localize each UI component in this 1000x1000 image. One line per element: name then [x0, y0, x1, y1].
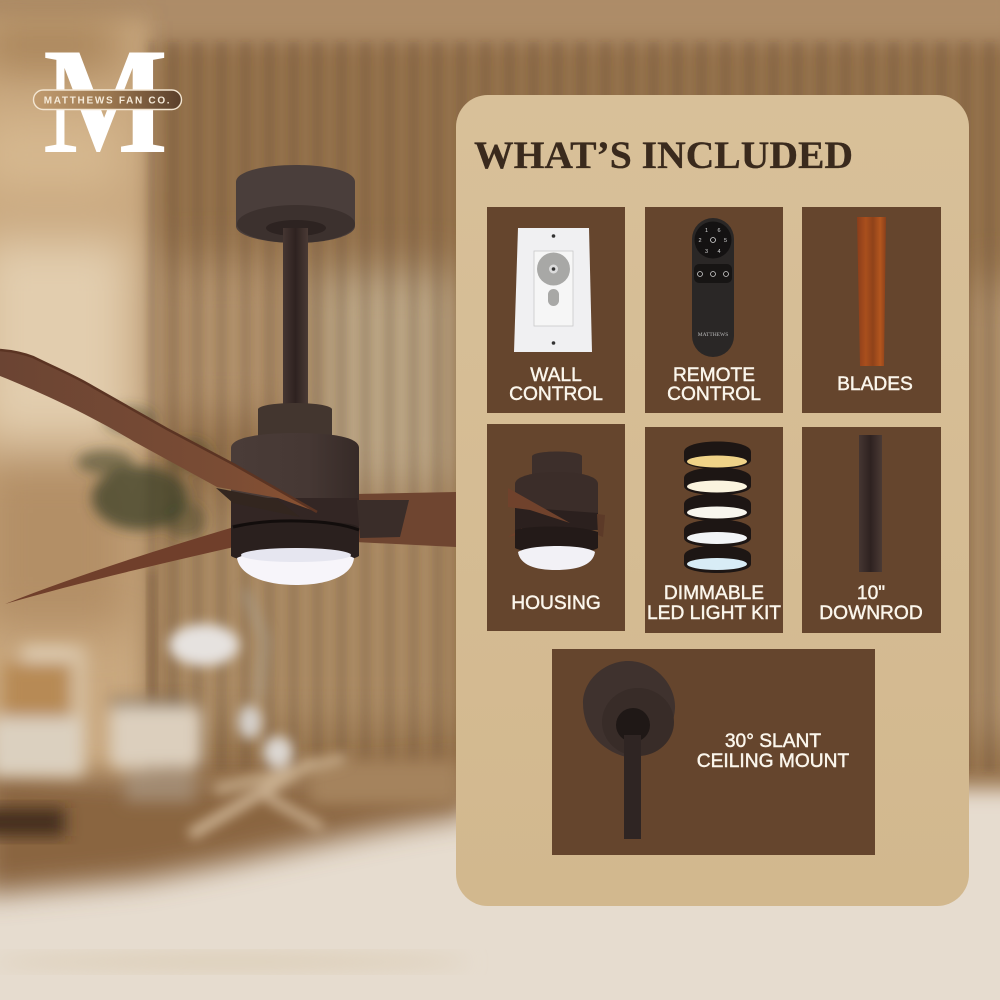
- label: DOWNROD: [819, 603, 923, 624]
- label: CEILING MOUNT: [697, 751, 849, 772]
- card: wall control: [487, 207, 625, 413]
- icon: slant mount: [583, 661, 675, 839]
- card: LED light kit: [645, 427, 783, 633]
- icon: remote: [692, 218, 734, 357]
- card: housing: [487, 424, 625, 631]
- label: CONTROL: [509, 384, 603, 405]
- fan: right blade bracket: [357, 500, 409, 538]
- label: CONTROL: [667, 384, 761, 405]
- logo: Matthews Fan Co.: MATTHEWS FAN CO.: [44, 96, 171, 106]
- icon: housing: [508, 452, 605, 570]
- label: 10": [857, 583, 885, 604]
- label: BLADES: [837, 374, 913, 395]
- fan: bracket under left blade: [216, 488, 300, 517]
- icon: downrod: [859, 435, 882, 572]
- fan: light diffuser: [237, 548, 354, 585]
- fan: left blade: [0, 350, 317, 512]
- icon: remote: 2: [698, 238, 702, 244]
- icon: remote: 6: [717, 228, 721, 234]
- fan: ceiling canopy: [236, 165, 355, 243]
- card: remote control: [645, 207, 783, 413]
- icon: remote: 4: [717, 249, 721, 255]
- fan: far right blade: [355, 492, 456, 547]
- label: REMOTE: [673, 365, 755, 386]
- icon: wall plate: [514, 228, 592, 352]
- icon: remote: 3: [705, 249, 708, 255]
- label: LED LIGHT KIT: [647, 603, 781, 624]
- fan: motor housing: [231, 403, 359, 564]
- icon: remote: 5: [724, 238, 727, 244]
- label: DIMMABLE: [664, 583, 764, 604]
- fan: rear lower blade: [5, 527, 234, 604]
- product photo: ceiling fan: [0, 165, 456, 604]
- icon: remote: 1: [705, 228, 708, 234]
- card: blades: [802, 207, 941, 413]
- card: downrod: [802, 427, 941, 633]
- logo: Matthews Fan Co.: M: [43, 17, 168, 185]
- floor and rug: [0, 790, 1000, 1000]
- label: WALL: [530, 365, 582, 386]
- furniture: [0, 646, 202, 802]
- label: HOUSING: [511, 593, 601, 614]
- panel: what's included: [456, 95, 969, 906]
- card: slant ceiling mount: [552, 649, 875, 855]
- icon: light stack: [684, 442, 751, 573]
- heading: WHAT’S INCLUDED: [474, 134, 853, 177]
- fan: downrod: [283, 228, 308, 404]
- label: 30° SLANT: [725, 731, 821, 752]
- plant: [77, 406, 212, 538]
- icon: remote: MATTHEWS: [698, 332, 728, 338]
- icon: blade: [857, 217, 886, 366]
